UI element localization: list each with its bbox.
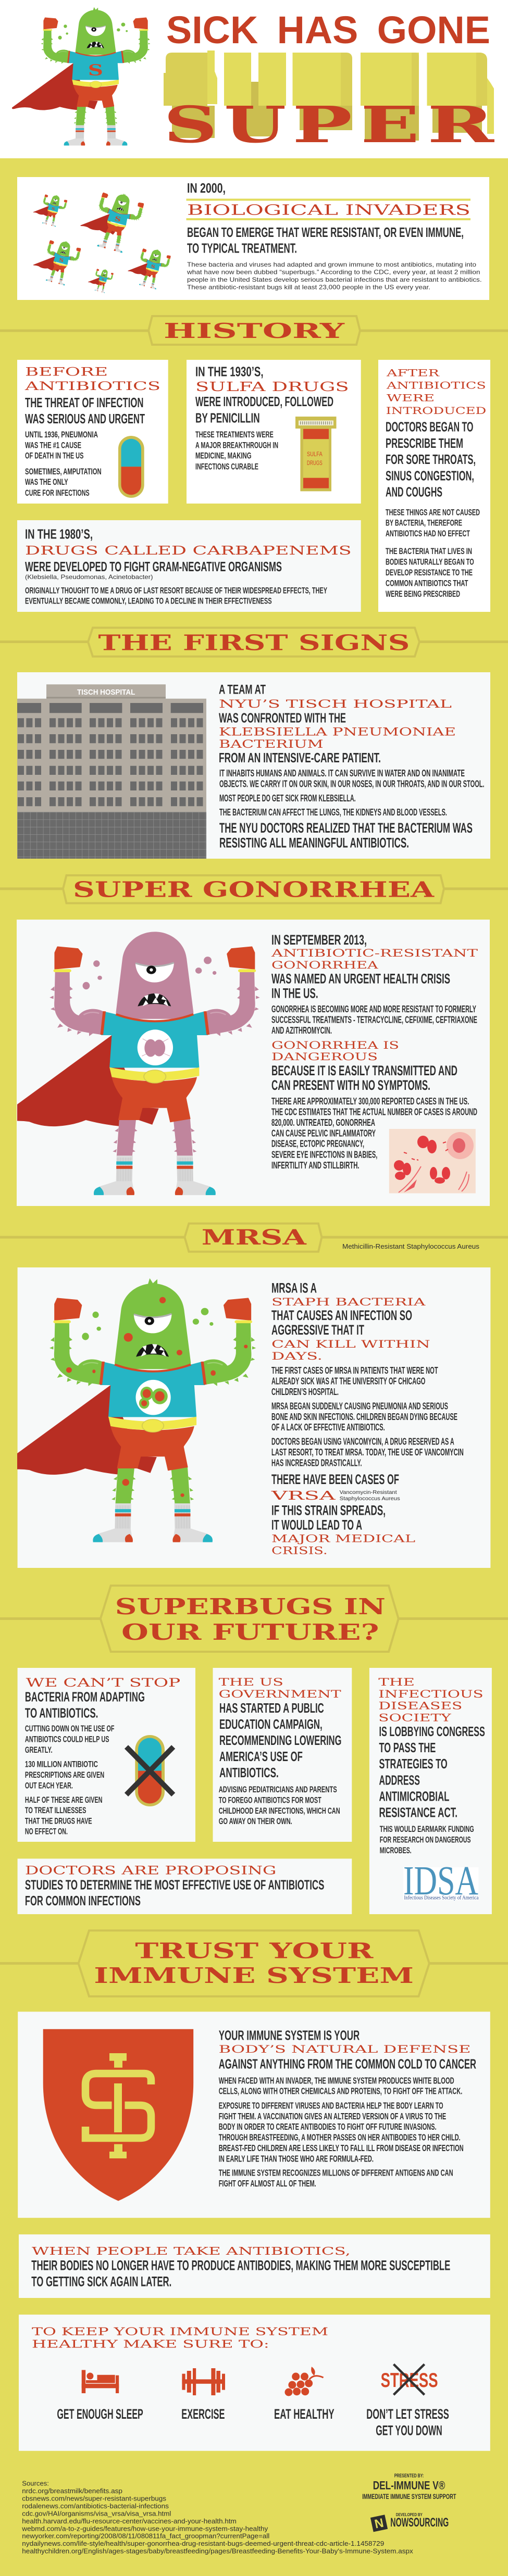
intro text <box>187 180 482 291</box>
sources <box>21 2480 413 2555</box>
panel: before antibiotics: SOMETIMES, AMPUTATION <box>25 467 102 476</box>
gonorrhea text: DANGEROUS <box>271 1050 378 1063</box>
immune system text: FIGHT OFF ALMOST ALL OF THEM. <box>219 2178 316 2189</box>
panel: carbapenems <box>17 520 361 612</box>
panel: we can't stop: GREATLY. <box>25 1745 53 1755</box>
panel: before antibiotics: WAS THE ONLY <box>25 477 68 487</box>
panel: we can't stop <box>18 1668 195 1842</box>
panel: biological invaders intro <box>17 177 489 300</box>
logo: idsa: IDSA <box>403 1858 478 1904</box>
banner: trust your immune system <box>0 1930 508 1996</box>
first signs text: NYU’S TISCH HOSPITAL <box>219 698 452 711</box>
first signs text: WAS CONFRONTED WITH THE <box>219 710 346 725</box>
mrsa text: AGGRESSIVE THAT IT <box>271 1322 364 1338</box>
sources: newyorker.com/reporting/2008/08/11/080811fa_fact_groopman?currentPage=all <box>22 2532 269 2540</box>
tip labels <box>57 2406 449 2438</box>
panel: carbapenems: DRUGS CALLED CARBAPENEMS <box>25 543 352 558</box>
panel: keep your immune system healthy: HEALTHY MAKE SURE TO: <box>32 2338 269 2350</box>
tip labels: EAT HEALTHY <box>274 2406 334 2422</box>
panel: before antibiotics: BEFORE <box>25 365 108 379</box>
panel: infectious diseases society: ANTIMICROBIAL <box>379 1788 450 1804</box>
title: super extruded letters: E <box>361 95 419 154</box>
panel: super gonorrhea <box>0 920 490 1206</box>
sources: webmd.com/a-to-z-guides/features/how-use-your-immune-system-stay-healthy <box>21 2524 268 2532</box>
icon: bed <box>82 2370 119 2393</box>
developed by nowsourcing credit: NOWSOURCING <box>390 2516 449 2530</box>
icon: nowsourcing badge: N <box>374 2516 385 2531</box>
presented by credit: DEL-IMMUNE V® <box>373 2479 445 2492</box>
intro text: people in the United States develop serious bacterial infections that are resistant to antibiotics. <box>187 276 482 283</box>
gonorrhea text: 820,000. UNTREATED, GONORRHEA <box>271 1117 375 1128</box>
panel: infectious diseases society: TO PASS THE <box>379 1740 436 1755</box>
panel: doctors are proposing: DOCTORS ARE PROPOSING <box>25 1865 276 1878</box>
developed by nowsourcing credit: DEVELOPED BY <box>396 2512 423 2517</box>
title: super extruded letters: S <box>164 95 217 154</box>
presented by credit: PRESENTED BY: <box>394 2473 424 2479</box>
title: super extruded letters <box>164 51 495 154</box>
icon: capsule <box>118 436 144 498</box>
mrsa text: STAPH BACTERIA <box>271 1296 426 1308</box>
presented by credit <box>362 2473 456 2500</box>
icon: crossed-out stress <box>381 2364 438 2395</box>
panel: we can't stop: HALF OF THESE ARE GIVEN <box>25 1795 103 1805</box>
title: super extruded letters: P <box>292 95 352 154</box>
mrsa text: HAS INCREASED DRASTICALLY. <box>271 1458 362 1468</box>
panel: sulfa drugs: IN THE 1930’S, <box>195 364 264 380</box>
banner: the first signs: THE FIRST SIGNS <box>98 630 410 655</box>
panel: the us government: ANTIBIOTICS. <box>219 1765 279 1780</box>
panel: the us government: TO FOREGO ANTIBIOTICS FOR MOST <box>219 1796 321 1805</box>
intro text: These antibiotic-resistant bugs kill at least 23,000 people in the US every year. <box>187 283 430 291</box>
panel: the us government: EDUCATION CAMPAIGN, <box>219 1716 323 1732</box>
illustration: tisch hospital building <box>17 684 206 859</box>
banner: the first signs <box>0 628 508 657</box>
intro text: BIOLOGICAL INVADERS <box>187 202 470 219</box>
panel: the us government: AMERICA’S USE OF <box>219 1749 303 1764</box>
banner: superbugs in our future: SUPERBUGS IN <box>115 1594 386 1619</box>
panel: infectious diseases society <box>369 1668 492 1914</box>
mrsa text <box>270 1280 464 1556</box>
mrsa text: MAJOR MEDICAL <box>271 1532 415 1545</box>
sources: healthychildren.org/English/ages-stages/baby/breastfeeding/pages/Breastfeeding-Benefits-Your-Baby's-Immune-System.aspx <box>22 2547 413 2555</box>
mrsa text: DAYS. <box>271 1350 323 1362</box>
mrsa text: CAN KILL WITHIN <box>271 1338 430 1350</box>
tip labels: DON’T LET STRESS <box>366 2406 449 2422</box>
panel: before antibiotics: UNTIL 1936, PNEUMONIA <box>25 430 98 439</box>
panel: the us government: THE US <box>219 1676 283 1688</box>
gonorrhea text: INFERTILITY AND STILLBIRTH. <box>271 1160 360 1171</box>
tip labels: EXERCISE <box>181 2406 225 2422</box>
tip labels: GET YOU DOWN <box>376 2422 442 2438</box>
intro text: These bacteria and viruses had adapted and grown immune to most antibiotics, mutating into <box>187 261 476 268</box>
mrsa text: IT WOULD LEAD TO A <box>271 1517 362 1533</box>
panel: we can't stop: WE CAN’T STOP <box>26 1676 180 1690</box>
panel: we can't stop: PRESCRIPTIONS ARE GIVEN <box>25 1770 104 1780</box>
panel: carbapenems: EVENTUALLY BECAME COMMONLY, LEADING TO A DECLINE IN THEIR EFFECTIVENESS <box>25 597 272 606</box>
gonorrhea text: IN THE US. <box>271 986 318 1001</box>
panel: after antibiotics were introduced: WERE BEING PRESCRIBED <box>386 589 460 599</box>
icon: crossed-out stress: STRESS <box>381 2369 438 2392</box>
panel: before antibiotics: OF DEATH IN THE US <box>25 451 83 461</box>
panel: we can't stop: THAT THE DRUGS HAVE <box>25 1816 92 1826</box>
panel: the us government: GOVERNMENT <box>219 1688 342 1700</box>
mrsa text: CRISIS. <box>271 1544 328 1556</box>
gonorrhea text: GONORRHEA <box>271 959 378 971</box>
panel: we can't stop: TO TREAT ILLNESSES <box>25 1806 86 1815</box>
immune system text: BODY’S NATURAL DEFENSE <box>219 2043 471 2055</box>
mrsa text: Staphylococcus Aureus <box>340 1496 400 1502</box>
presented by credit: IMMEDIATE IMMUNE SYSTEM SUPPORT <box>362 2493 456 2500</box>
panel: sulfa drugs: A MAJOR BREAKTHROUGH IN <box>195 441 278 450</box>
sources: rodalenews.com/antibiotics-bacterial-infections <box>22 2502 169 2510</box>
panel: we can't stop: BACTERIA FROM ADAPTING <box>25 1689 145 1704</box>
gonorrhea text: ANTIBIOTIC-RESISTANT <box>270 947 478 959</box>
illustration: tisch hospital building: TISCH HOSPITAL <box>77 688 135 697</box>
panel: infectious diseases society: THE <box>378 1676 415 1688</box>
immune system text <box>219 2028 476 2189</box>
panel: sulfa drugs: INFECTIONS CURABLE <box>195 462 258 471</box>
sources: health.harvard.edu/flu-resource-center/vaccines-and-your-health.htm <box>22 2517 237 2525</box>
panel: the us government: GO AWAY ON THEIR OWN. <box>219 1817 292 1826</box>
banner: history: HISTORY <box>164 319 345 343</box>
mascot: green superbug <box>12 7 151 146</box>
developed by nowsourcing credit <box>370 2512 449 2532</box>
panel: the us government: CHILDHOOD EAR INFECTIONS, WHICH CAN <box>219 1806 340 1816</box>
gonorrhea text: AND AZITHROMYCIN. <box>271 1025 332 1036</box>
gonorrhea text: IN SEPTEMBER 2013, <box>271 932 367 948</box>
panel: infectious diseases society: SOCIETY <box>378 1712 452 1724</box>
panel: sulfa drugs <box>187 360 361 504</box>
panel: infectious diseases society: INFECTIOUS <box>378 1688 484 1700</box>
panel: keep your immune system healthy <box>19 2315 490 2451</box>
sources: cbsnews.com/news/super-resistant-superbugs <box>22 2494 167 2502</box>
gonorrhea text: SEVERE EYE INFECTIONS IN BABIES, <box>271 1149 377 1160</box>
tip labels: GET ENOUGH SLEEP <box>57 2406 143 2422</box>
panel: we can't stop: ANTIBIOTICS COULD HELP US <box>25 1735 109 1744</box>
mrsa text: Vancomycin-Resistant <box>340 1489 397 1496</box>
gonorrhea text: DISEASE, ECTOPIC PREGNANCY, <box>271 1139 364 1149</box>
sources: Sources: <box>22 2480 49 2487</box>
title: sick has gone: SICK HAS GONE <box>166 8 490 52</box>
icon: nowsourcing badge <box>370 2515 388 2532</box>
first signs text: A TEAM AT <box>219 683 266 697</box>
panel: infectious diseases society: STRATEGIES TO <box>379 1756 448 1771</box>
icon: pill bottle: DRUGS <box>307 459 323 467</box>
banner: super gonorrhea <box>0 875 508 903</box>
panel: we can't stop: NO EFFECT ON. <box>25 1827 68 1837</box>
illustration: pink gonorrhea monster <box>0 932 260 1195</box>
mrsa text: OF A LACK OF EFFECTIVE ANTIBIOTICS. <box>271 1422 385 1432</box>
panel: after antibiotics were introduced <box>378 360 490 612</box>
panel: infectious diseases society: RESISTANCE ACT. <box>379 1804 457 1820</box>
panel: we can't stop: CUTTING DOWN ON THE USE OF <box>25 1724 115 1733</box>
panel: sulfa drugs: WERE INTRODUCED, FOLLOWED <box>195 394 333 409</box>
panel: after antibiotics were introduced: PRESCRIBE THEM <box>386 435 463 451</box>
panel: infectious diseases society: ADDRESS <box>379 1772 420 1788</box>
first signs text <box>219 683 485 850</box>
gonorrhea text: GONORRHEA IS <box>271 1039 399 1051</box>
panel: after antibiotics were introduced: BY BACTERIA, THEREFORE <box>386 519 462 528</box>
panel: when people take antibiotics: WHEN PEOPLE TAKE ANTIBIOTICS, <box>32 2245 351 2257</box>
icon: pill bottle <box>295 417 337 491</box>
panel: infectious diseases society: DISEASES <box>378 1700 462 1712</box>
icon: crossed-out capsule <box>126 1735 174 1806</box>
panel: doctors are proposing <box>18 1858 352 1914</box>
panel: the first signs <box>17 672 490 859</box>
banner: super gonorrhea: SUPER GONORRHEA <box>73 877 435 902</box>
panel: when people take antibiotics <box>19 2234 490 2298</box>
panel: we can't stop: OUT EACH YEAR. <box>25 1781 73 1790</box>
panel: the us government <box>213 1668 352 1842</box>
banner: mrsa <box>0 1224 508 1252</box>
panel: when people take antibiotics: TO GETTING SICK AGAIN LATER. <box>31 2274 171 2290</box>
banner: trust your immune system: TRUST YOUR <box>135 1938 374 1963</box>
panel: infectious diseases society: MICROBES. <box>380 1846 412 1855</box>
intro text: what have now been dubbed “superbugs.” According to the CDC, every year, at least 2 million <box>187 269 480 276</box>
immune system text: YOUR IMMUNE SYSTEM IS YOUR <box>219 2028 360 2043</box>
panel: carbapenems: ORIGINALLY THOUGHT TO ME A DRUG OF LAST RESORT BECAUSE OF THEIR WIDESPREAD EFFECTS, THEY <box>25 586 327 595</box>
icon: dumbbell <box>182 2368 225 2395</box>
intro text: TO TYPICAL TREATMENT. <box>187 241 297 256</box>
panel: doctors are proposing: STUDIES TO DETERMINE THE MOST EFFECTIVE USE OF ANTIBIOTICS <box>25 1877 324 1892</box>
panel: doctors are proposing: FOR COMMON INFECTIONS <box>25 1893 141 1908</box>
panel: sulfa drugs: MEDICINE, MAKING <box>195 451 251 461</box>
first signs text: FROM AN INTENSIVE-CARE PATIENT. <box>219 750 381 765</box>
banner: history <box>0 316 508 345</box>
panel: mrsa <box>0 1267 490 1568</box>
gonorrhea text <box>270 932 478 1171</box>
flying mini superbugs <box>30 185 172 294</box>
note: mrsa definition: Methicillin-Resistant Staphylococcus Aureus <box>342 1242 480 1250</box>
banner: mrsa: MRSA <box>202 1225 307 1250</box>
panel: after antibiotics were introduced: WERE <box>387 393 435 404</box>
mrsa text: THAT CAUSES AN INFECTION SO <box>271 1308 412 1323</box>
mrsa text: IF THIS STRAIN SPREADS, <box>271 1502 386 1518</box>
first signs text: MOST PEOPLE DO GET SICK FROM KLEBSIELLA. <box>219 793 356 803</box>
panel: before antibiotics: ANTIBIOTICS <box>24 380 160 393</box>
panel: before antibiotics: THE THREAT OF INFECTION <box>25 395 144 410</box>
banner: superbugs in our future: OUR FUTURE? <box>121 1619 379 1645</box>
panel: the us government: RECOMMENDING LOWERING <box>219 1732 341 1748</box>
icon: pill bottle: SULFA <box>307 450 323 458</box>
icon: immune shield <box>43 2029 193 2201</box>
panel: the us government: ADVISING PEDIATRICIANS AND PARENTS <box>219 1785 337 1794</box>
panel: immune system <box>18 2012 490 2218</box>
gonorrhea text: CAN CAUSE PELVIC INFLAMMATORY <box>271 1128 376 1139</box>
sources: cdc.gov/HAI/organisms/visa_vrsa/visa_vrsa.html <box>22 2509 171 2517</box>
panel: after antibiotics were introduced: AFTER <box>386 368 440 379</box>
panel: after antibiotics were introduced: INTRODUCED <box>386 406 486 417</box>
panel: before antibiotics <box>17 360 168 504</box>
panel: after antibiotics were introduced: COMMON ANTIBIOTICS THAT <box>386 579 468 588</box>
intro text: IN 2000, <box>187 180 226 196</box>
panel: keep your immune system healthy: TO KEEP YOUR IMMUNE SYSTEM <box>32 2326 328 2338</box>
mrsa text: MRSA IS A <box>271 1280 317 1296</box>
sources: nrdc.org/breastmilk/benefits.asp <box>22 2487 122 2495</box>
panel: before antibiotics: WAS THE #1 CAUSE <box>25 441 81 450</box>
mrsa text: THERE HAVE BEEN CASES OF <box>271 1472 399 1487</box>
panel: we can't stop: 130 MILLION ANTIBIOTIC <box>25 1760 98 1769</box>
panel: sulfa drugs: SULFA DRUGS <box>195 380 349 394</box>
title: super extruded letters: U <box>224 95 286 154</box>
panel: sulfa drugs: THESE TREATMENTS WERE <box>195 430 274 439</box>
title: super extruded letters: R <box>427 95 495 154</box>
panel: after antibiotics were introduced: AND COUGHS <box>386 484 442 499</box>
immune system text: IN EARLY LIFE THAN THOSE WHO ARE FORMULA-FED. <box>219 2154 374 2164</box>
panel: sulfa drugs: BY PENICILLIN <box>195 410 260 425</box>
header <box>0 0 508 158</box>
first signs text: KLEBSIELLA PNEUMONIAE <box>219 725 456 738</box>
panel: before antibiotics: CURE FOR INFECTIONS <box>25 488 90 498</box>
logo: idsa: Infectious Diseases Society of America <box>404 1895 479 1901</box>
mrsa text: CHILDREN’S HOSPITAL. <box>271 1387 339 1397</box>
panel: the us government: HAS STARTED A PUBLIC <box>219 1700 324 1716</box>
illustration: gonorrhea cells micrograph <box>389 1129 476 1193</box>
illustration: green mrsa monster <box>0 1278 256 1542</box>
banner: superbugs in our future <box>0 1586 508 1652</box>
panel: after antibiotics were introduced: ANTIBIOTICS <box>386 381 486 392</box>
first signs text: BACTERIUM <box>219 738 324 751</box>
panel: carbapenems: IN THE 1980’S, <box>25 526 93 542</box>
sources: nydailynews.com/life-style/health/super-gonorrhea-drug-resistant-bugs-deemed-urgent-threat-cdc-article-1.1458729 <box>22 2540 384 2547</box>
panel: we can't stop: TO ANTIBIOTICS. <box>25 1705 98 1720</box>
panel: carbapenems: (Klebsiella, Pseudomonas, Acinetobacter) <box>25 573 153 581</box>
panel: carbapenems: WERE DEVELOPED TO FIGHT GRAM-NEGATIVE ORGANISMS <box>25 559 282 574</box>
mrsa text: VRSA <box>270 1489 336 1503</box>
panel: before antibiotics: WAS SERIOUS AND URGENT <box>25 411 145 426</box>
banner: trust your immune system: IMMUNE SYSTEM <box>94 1963 414 1988</box>
icon: grapes <box>284 2367 324 2396</box>
